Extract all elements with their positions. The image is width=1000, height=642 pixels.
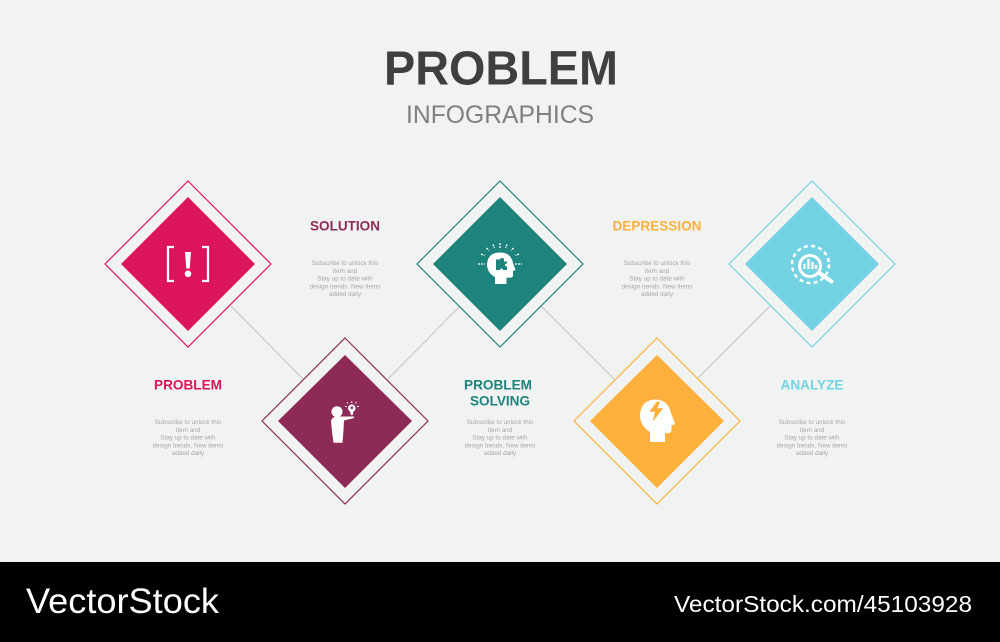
label: problem: item and <box>176 427 201 434</box>
icon: magnifier with bars <box>792 246 832 283</box>
icon: head with lightning bolt <box>640 400 675 442</box>
label: analyze: item and <box>800 427 825 434</box>
label: problem solving: item and <box>488 427 513 434</box>
label: analyze: added daily <box>796 450 829 457</box>
label: problem solving: design trends. New items <box>465 442 535 450</box>
label: analyze: Subscribe to unlock this <box>779 419 845 426</box>
label: problem <box>153 376 223 457</box>
label: problem: design trends. New items <box>153 442 223 450</box>
label: depression <box>612 218 702 298</box>
label: solution: item and <box>333 268 358 275</box>
label: problem: PROBLEM <box>154 376 222 392</box>
title: PROBLEM <box>384 42 618 96</box>
label: solution: added daily <box>329 291 362 298</box>
label: problem solving <box>464 376 535 457</box>
label: solution: Subscribe to unlock this <box>312 260 378 267</box>
icon: exclamation in brackets <box>168 247 208 281</box>
label: solution <box>310 218 380 298</box>
label: problem solving: Subscribe to unlock this <box>467 419 533 426</box>
label: problem solving: PROBLEM <box>464 376 532 392</box>
label: problem solving: added daily <box>484 450 517 457</box>
label: depression: DEPRESSION <box>612 218 702 234</box>
footer bar <box>0 562 1000 642</box>
label: depression: added daily <box>641 291 674 298</box>
label: problem: Stay up to date with <box>160 434 216 442</box>
label: depression: item and <box>645 268 670 275</box>
diamond: problem <box>105 181 271 347</box>
label: problem: added daily <box>172 450 205 457</box>
subtitle: INFOGRAPHICS <box>406 101 594 129</box>
diamond: problem solving <box>417 181 583 347</box>
label: analyze: Stay up to date with <box>784 434 840 442</box>
label: problem solving: Stay up to date with <box>472 434 528 442</box>
diamond: solution <box>262 338 428 504</box>
label: depression: Stay up to date with <box>629 276 685 282</box>
label: solution: SOLUTION <box>310 218 380 234</box>
label: depression: design trends. New items <box>622 284 692 290</box>
label: solution: Stay up to date with <box>317 276 373 282</box>
label: solution: design trends. New items <box>310 284 380 290</box>
label: analyze <box>777 376 847 457</box>
icon: person holding light bulb <box>331 401 359 443</box>
icon: head with puzzle piece <box>478 243 522 284</box>
diamond: analyze <box>729 181 895 347</box>
diamond: depression <box>574 338 740 504</box>
label: problem: Subscribe to unlock this <box>155 419 221 426</box>
footer bar: VectorStock <box>26 582 220 621</box>
footer bar: VectorStock.com/45103928 <box>674 591 972 617</box>
label: depression: Subscribe to unlock this <box>624 260 690 267</box>
label: analyze: design trends. New items <box>777 442 847 450</box>
label: problem solving: SOLVING <box>470 392 530 408</box>
label: analyze: ANALYZE <box>780 376 844 392</box>
